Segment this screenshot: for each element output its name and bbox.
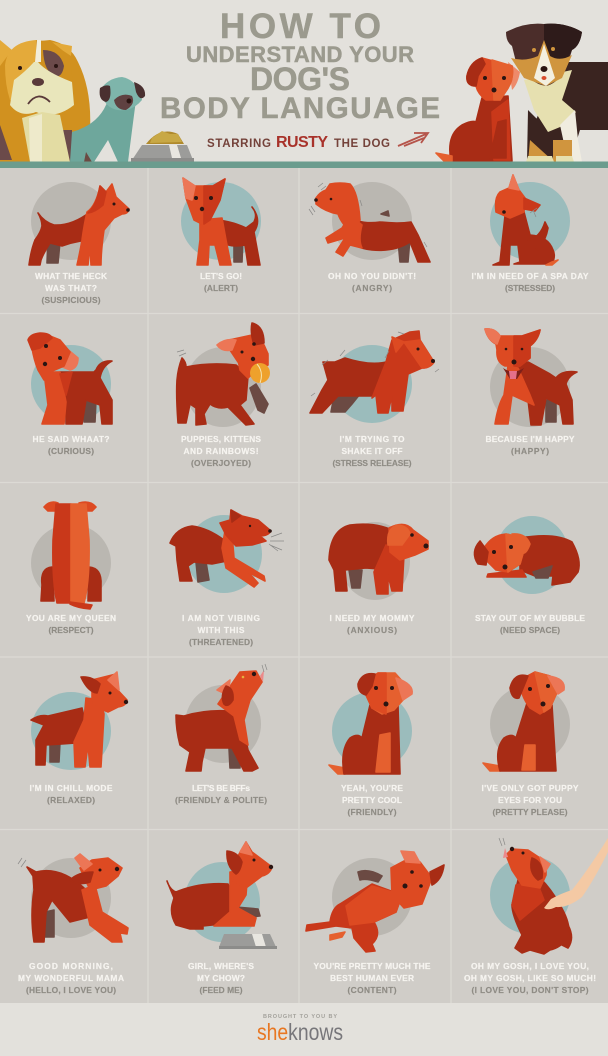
panel: anxious — [329, 522, 428, 635]
circle backdrop — [184, 862, 260, 942]
caption: WAS THAT? — [45, 283, 97, 293]
caption: MY CHOW? — [197, 973, 245, 983]
caption: (PRETTY PLEASE) — [492, 807, 568, 817]
icon: dog need space — [474, 534, 579, 585]
caption: STAY OUT OF MY BUBBLE — [475, 613, 585, 623]
circle backdrop — [31, 524, 111, 602]
icon: dog threatened — [170, 510, 284, 587]
circle backdrop — [181, 182, 261, 260]
panel: happy — [485, 329, 577, 456]
caption: EYES FOR YOU — [498, 795, 562, 805]
caption: YOU'RE PRETTY MUCH THE — [314, 961, 431, 971]
caption — [330, 613, 415, 635]
caption — [30, 783, 113, 805]
icon: dog respect — [41, 502, 101, 609]
caption: I'M TRYING TO — [340, 434, 405, 444]
circle backdrop — [332, 858, 412, 936]
subtitle: starring rusty: THE DOG — [334, 138, 390, 150]
icon: dog hello — [18, 854, 128, 942]
caption: (FEED ME) — [200, 985, 243, 995]
circle backdrop — [490, 685, 570, 763]
panel: feed me — [167, 842, 277, 995]
icon: dog angry — [309, 183, 430, 262]
ground line — [0, 162, 608, 168]
caption: (ANXIOUS) — [347, 625, 397, 635]
caption: GOOD MORNING, — [29, 961, 113, 971]
circle backdrop — [31, 692, 111, 770]
caption: HE SAID WHAAT? — [32, 434, 110, 444]
caption: (RESPECT) — [48, 625, 94, 635]
panel: stressed — [472, 175, 589, 293]
subtitle: starring rusty — [207, 134, 390, 151]
caption: (STRESS RELEASE) — [332, 458, 412, 468]
caption — [314, 961, 431, 995]
caption: (NEED SPACE) — [500, 625, 560, 635]
caption — [475, 613, 585, 635]
caption: PUPPIES, KITTENS — [181, 434, 261, 444]
caption: (CONTENT) — [348, 985, 397, 995]
circle backdrop — [332, 692, 412, 770]
icon: pug — [70, 77, 145, 162]
circle backdrop — [495, 516, 569, 594]
panel: relaxed — [30, 672, 128, 805]
panel: threatened — [170, 510, 284, 647]
icon: dog friendly and polite — [176, 664, 267, 771]
caption: (CURIOUS) — [48, 446, 94, 456]
logo: sheknows: sheknows — [257, 1019, 343, 1045]
caption: SHAKE IT OFF — [342, 446, 402, 456]
icon: dog stressed — [493, 175, 558, 265]
caption: (SUSPICIOUS) — [42, 295, 101, 305]
panel: hello — [18, 854, 128, 995]
caption — [341, 783, 403, 817]
caption: OH MY GOSH, I LOVE YOU, — [471, 961, 589, 971]
circle backdrop — [31, 182, 111, 260]
title — [160, 7, 440, 125]
caption — [32, 434, 110, 456]
caption — [482, 783, 579, 817]
caption — [35, 271, 107, 305]
caption: BECAUSE I'M HAPPY — [486, 434, 575, 444]
circle backdrop — [490, 347, 570, 427]
footer credit: BROUGHT TO YOU BY — [263, 1014, 337, 1020]
circle backdrop — [186, 515, 262, 593]
circle backdrop — [31, 858, 111, 938]
icon: feed bowl — [219, 934, 277, 949]
icon: petting hand — [544, 838, 608, 909]
circle backdrop — [490, 856, 570, 934]
icon: dog curious — [28, 333, 112, 424]
title: UNDERSTAND YOUR — [186, 42, 414, 67]
circle backdrop — [332, 345, 412, 423]
icon: dog feed me — [167, 842, 273, 929]
caption: (ALERT) — [204, 283, 238, 293]
icon: food bowl — [131, 131, 194, 162]
panel: pretty please — [482, 672, 579, 817]
caption: YOU ARE MY QUEEN — [26, 613, 116, 623]
caption — [472, 271, 589, 293]
caption: LET'S GO! — [200, 271, 242, 281]
caption: (OVERJOYED) — [191, 458, 251, 468]
caption: (STRESSED) — [505, 283, 555, 293]
icon: dog happy — [485, 329, 577, 425]
arrow — [398, 133, 428, 146]
icon: aussie shepherd — [506, 24, 608, 162]
caption — [188, 961, 254, 995]
caption: (HAPPY) — [511, 446, 549, 456]
panel: curious — [28, 333, 112, 456]
icon: dog relaxed — [31, 672, 128, 767]
panel: overjoyed — [177, 323, 270, 468]
panel: friendly and polite — [175, 664, 267, 805]
caption: PRETTY COOL — [342, 795, 402, 805]
caption: I'M IN NEED OF A SPA DAY — [472, 271, 589, 281]
panel: friendly — [329, 673, 412, 817]
caption — [464, 961, 596, 995]
caption: OH MY GOSH, LIKE SO MUCH! — [464, 973, 596, 983]
caption: I'VE ONLY GOT PUPPY — [482, 783, 579, 793]
panel: content — [306, 851, 444, 995]
circle backdrop — [340, 522, 410, 600]
caption — [26, 613, 116, 635]
caption: (I LOVE YOU, DON'T STOP) — [472, 985, 589, 995]
caption: I NEED MY MOMMY — [330, 613, 415, 623]
icon: dog content — [306, 851, 444, 952]
caption: (FRIENDLY) — [348, 807, 397, 817]
panel: suspicious — [29, 182, 130, 305]
icon: rusty — [436, 58, 520, 161]
caption: (RELAXED) — [47, 795, 95, 805]
caption — [18, 961, 124, 995]
panel: angry — [309, 182, 430, 293]
caption: YEAH, YOU'RE — [341, 783, 403, 793]
icon: dog stress release — [310, 331, 439, 413]
caption — [328, 271, 416, 293]
circle backdrop — [332, 182, 412, 260]
panel: i love you — [464, 838, 608, 995]
subtitle: starring rusty: STARRING — [207, 138, 271, 150]
circle backdrop — [185, 347, 261, 427]
circle backdrop — [31, 345, 111, 423]
title: DOG'S — [250, 61, 350, 97]
caption: WHAT THE HECK — [35, 271, 107, 281]
caption: (THREATENED) — [189, 637, 253, 647]
title: BODY LANGUAGE — [160, 92, 440, 125]
icon: dog suspicious — [29, 184, 130, 265]
caption — [486, 434, 575, 456]
caption: BEST HUMAN EVER — [330, 973, 414, 983]
subtitle: starring rusty: RUSTY — [276, 134, 328, 151]
caption — [181, 434, 261, 468]
icon: bulldog — [0, 40, 90, 162]
caption: I'M IN CHILL MODE — [30, 783, 113, 793]
caption: GIRL, WHERE'S — [188, 961, 254, 971]
icon: dog overjoyed — [177, 323, 270, 425]
caption: MY WONDERFUL MAMA — [18, 973, 124, 983]
caption — [175, 783, 267, 805]
icon: dog i love you — [499, 838, 572, 954]
circle backdrop — [185, 685, 261, 763]
icon: dog anxious — [329, 524, 428, 594]
icon: dog friendly — [329, 673, 412, 774]
title: HOW TO — [220, 7, 381, 46]
caption: (HELLO, I LOVE YOU) — [26, 985, 116, 995]
panel: respect — [26, 502, 116, 635]
panel: alert — [181, 178, 261, 293]
icon: dog alert — [183, 178, 260, 265]
caption — [332, 434, 412, 468]
caption: LET'S BE BFFs — [192, 783, 250, 793]
caption: (ANGRY) — [352, 283, 392, 293]
caption: I AM NOT VIBING — [182, 613, 260, 623]
caption: OH NO YOU DIDN'T! — [328, 271, 416, 281]
icon: dog pretty please — [483, 672, 564, 771]
caption: AND RAINBOWS! — [184, 446, 258, 456]
panel: need space — [474, 516, 585, 635]
caption — [182, 613, 260, 647]
caption — [200, 271, 242, 293]
circle backdrop — [490, 182, 570, 260]
panel: stress release — [310, 331, 439, 468]
caption: (FRIENDLY & POLITE) — [175, 795, 267, 805]
caption: WITH THIS — [198, 625, 245, 635]
